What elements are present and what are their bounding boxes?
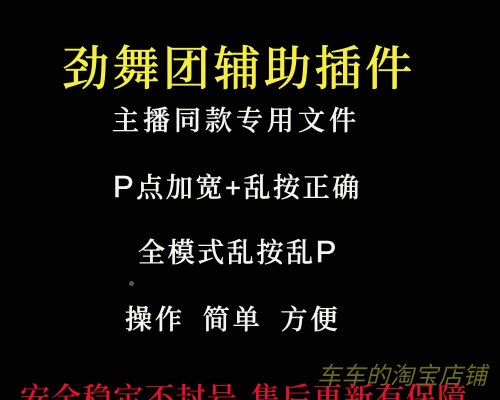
feature line: easy to use: 操作 简单 方便 — [125, 305, 340, 335]
title: 劲舞团辅助插件 — [62, 44, 416, 96]
watermark: 车车的淘宝店铺 — [317, 363, 487, 390]
decorative dot — [129, 281, 134, 286]
feature line: all modes: 全模式乱按乱P — [138, 234, 339, 269]
subtitle: streamer file: 主播同款专用文件 — [112, 106, 360, 136]
feature line: P point: P点加宽+乱按正确 — [113, 169, 362, 204]
